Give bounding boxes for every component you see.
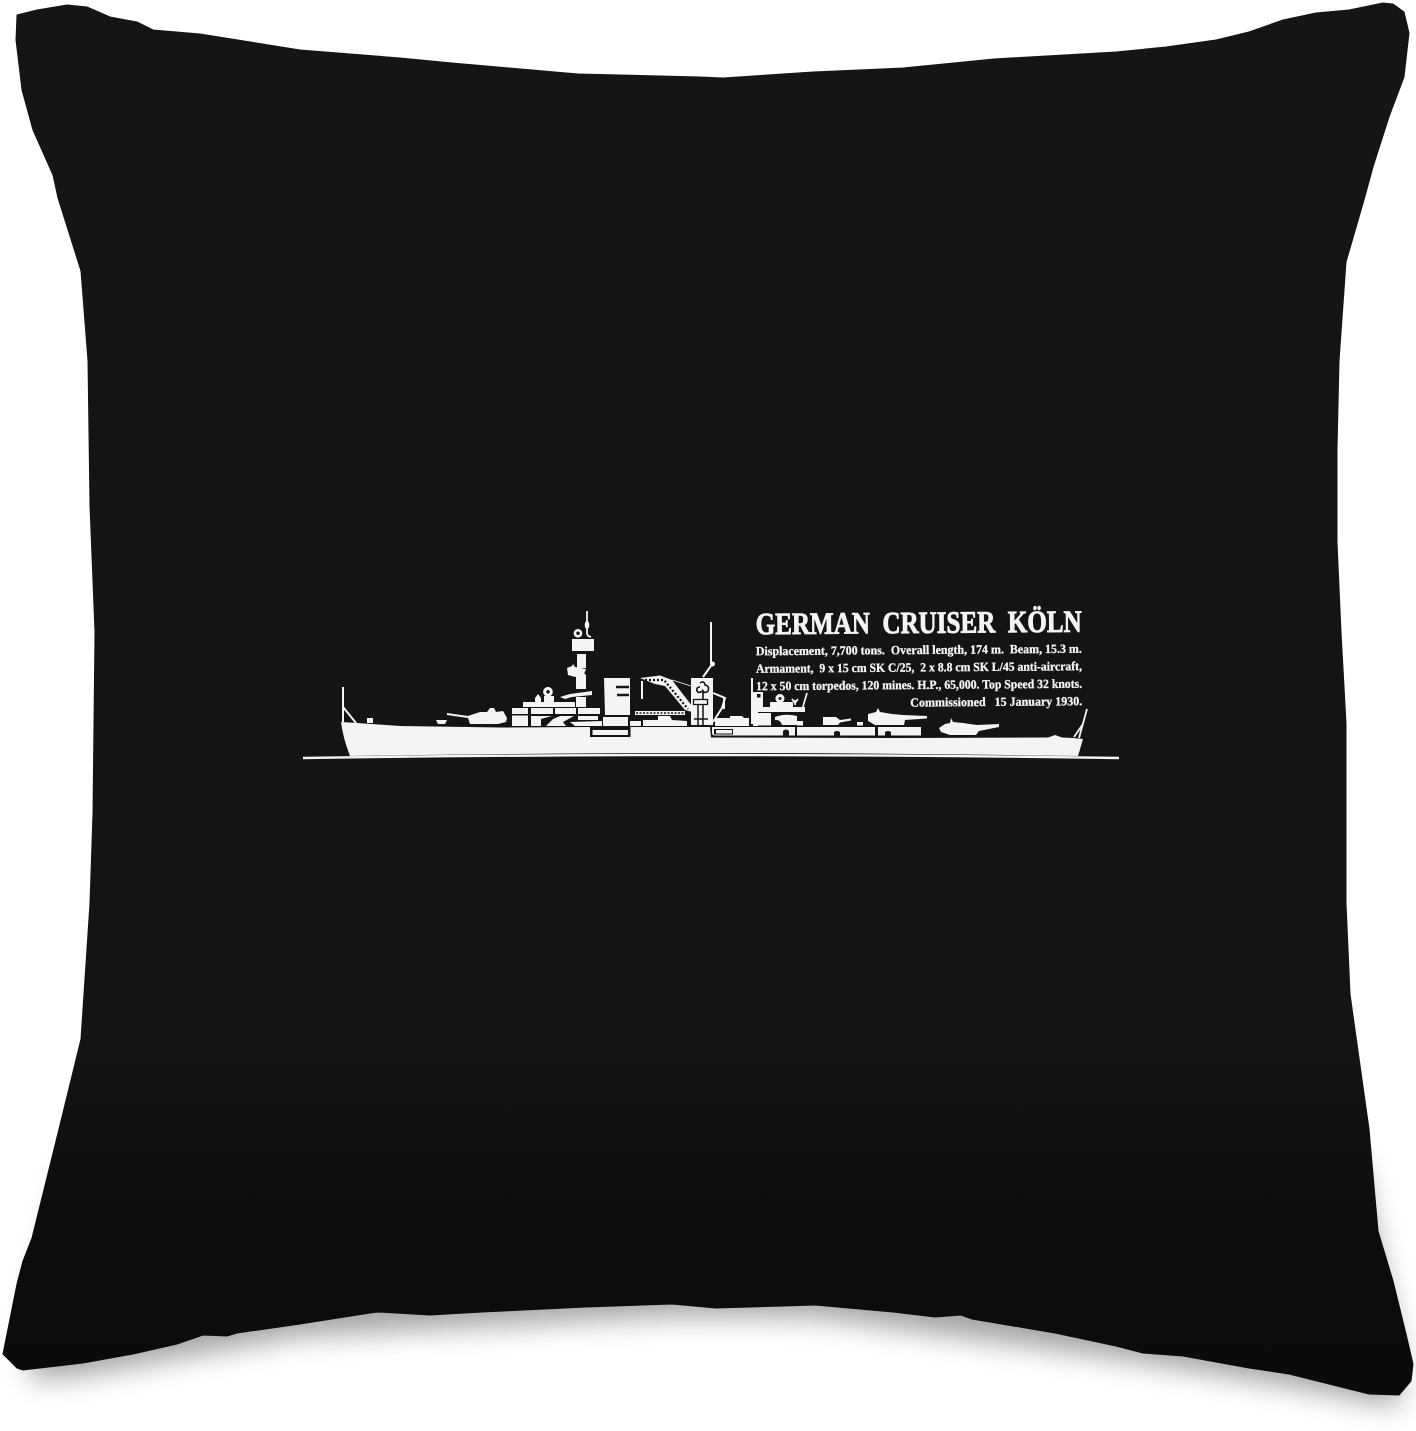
funnel — [603, 678, 630, 726]
bow staff — [343, 687, 356, 723]
foredeck fittings — [367, 718, 447, 724]
specification line 4: Commissioned 15 January 1930. — [910, 694, 1082, 710]
forward director — [543, 687, 553, 697]
aft turret C — [868, 708, 927, 725]
hangar — [691, 678, 713, 726]
catapult platform — [635, 711, 685, 715]
ship silhouette: German cruiser Köln — [303, 611, 1119, 758]
stern staff — [1074, 709, 1087, 738]
aft turret D — [939, 718, 999, 735]
specification line 2: Armament, 9 x 15 cm SK C/25, 2 x 8.8 cm SK L/45 anti-aircraft, — [756, 659, 1082, 676]
main mast — [703, 622, 725, 722]
aft superstructure — [715, 678, 807, 726]
forward turret A — [447, 708, 507, 724]
title: GERMAN CRUISER KÖLN — [755, 604, 1082, 641]
conning tower — [560, 611, 594, 707]
lower bridge blocks — [512, 708, 602, 726]
heading and specification text — [755, 604, 1082, 711]
hull recess — [590, 726, 630, 737]
aircraft crane — [640, 676, 692, 712]
aft deck band — [712, 727, 921, 736]
waterline — [303, 755, 1119, 758]
midship low blocks — [630, 716, 687, 726]
pillow drop shadow — [30, 1162, 1400, 1407]
hull — [341, 722, 1083, 756]
upper bridge step — [523, 694, 575, 707]
specification line 1: Displacement, 7,700 tons. Overall length, 174 m. Beam, 15.3 m. — [756, 642, 1082, 658]
specification line 3: 12 x 50 cm torpedos, 120 mines. H.P., 65,000. Top Speed 32 knots. — [756, 677, 1082, 693]
low aft gun mount — [823, 717, 851, 725]
